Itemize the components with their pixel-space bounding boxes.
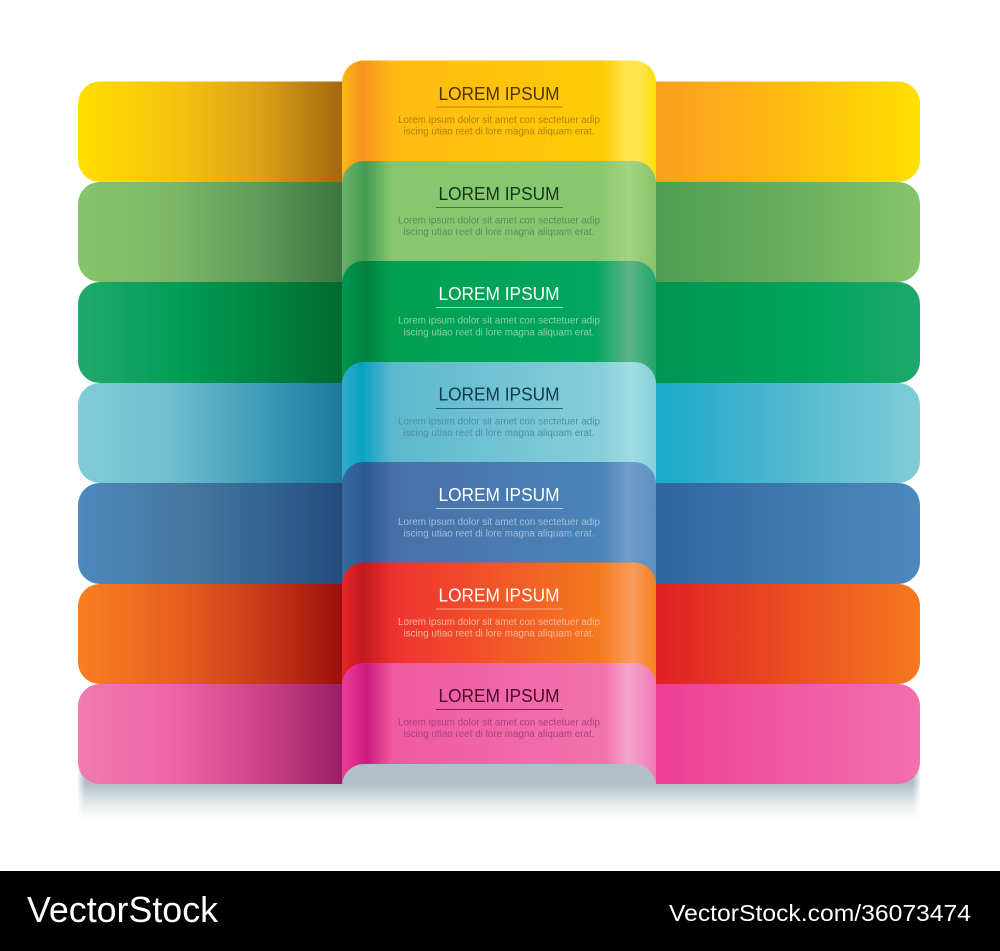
band 7 right: pink bbox=[656, 684, 920, 784]
band 3 left: dark green bbox=[78, 282, 342, 383]
body text 2: iscing utiao reet di lore magna aliquam erat. bbox=[404, 227, 594, 238]
band 4 left: light blue bbox=[78, 383, 342, 483]
band 6 right: orange red bbox=[656, 584, 920, 684]
body text 3: Lorem ipsum dolor sit amet con sectetuer adip bbox=[398, 316, 600, 326]
body text 5: Lorem ipsum dolor sit amet con sectetuer adip bbox=[398, 517, 600, 528]
panel 1: yellow card bbox=[342, 60, 656, 190]
body text 6: iscing utiao reet di lore magna aliquam erat. bbox=[404, 628, 594, 640]
body text 1: iscing utiao reet di lore magna aliquam erat. bbox=[404, 126, 594, 138]
panel 2: light green card bbox=[342, 161, 656, 290]
band 6 left: orange red bbox=[78, 584, 342, 684]
drop shadow under bands bbox=[78, 768, 920, 820]
band 2 right: light green bbox=[656, 182, 920, 282]
body text 1: Lorem ipsum dolor sit amet con sectetuer adip bbox=[398, 115, 600, 126]
body text 4: iscing utiao reet di lore magna aliquam erat. bbox=[404, 428, 594, 439]
band 1 left: yellow bbox=[78, 82, 342, 182]
band 4 right: light blue bbox=[656, 383, 920, 483]
side bands bbox=[78, 82, 920, 784]
heading 4: LOREM IPSUM bbox=[438, 384, 560, 404]
body text 4: Lorem ipsum dolor sit amet con sectetuer adip bbox=[398, 416, 600, 428]
body text 1 bbox=[398, 115, 600, 138]
footer bar bbox=[0, 871, 1000, 951]
panel 3: dark green card bbox=[342, 261, 656, 390]
body text 4 bbox=[398, 416, 600, 439]
band 5 right: blue bbox=[656, 483, 920, 584]
band 2 left: light green bbox=[78, 182, 342, 282]
heading 2: LOREM IPSUM bbox=[438, 184, 560, 204]
body text 5: iscing utiao reet di lore magna aliquam erat. bbox=[404, 528, 594, 540]
body text 6: Lorem ipsum dolor sit amet con sectetuer adip bbox=[398, 617, 600, 628]
panel 4: light blue card bbox=[342, 362, 656, 490]
band 1 right: yellow bbox=[656, 82, 920, 182]
footer image id: VectorStock.com/36073474 bbox=[669, 900, 971, 926]
body text 3: iscing utiao reet di lore magna aliquam erat. bbox=[404, 328, 594, 338]
grey base tab bbox=[342, 764, 656, 784]
footer logo wordmark: VectorStock bbox=[27, 889, 219, 930]
body text 2: Lorem ipsum dolor sit amet con sectetuer adip bbox=[398, 216, 600, 226]
panel 7: pink card bbox=[342, 663, 656, 784]
band 3 right: dark green bbox=[656, 282, 920, 383]
body text 7: iscing utiao reet di lore magna aliquam erat. bbox=[404, 729, 594, 740]
band 7 left: pink bbox=[78, 684, 342, 784]
body text 7 bbox=[398, 718, 600, 740]
panel 6: red orange card bbox=[342, 562, 656, 690]
body text 6 bbox=[398, 617, 600, 640]
heading 3: LOREM IPSUM bbox=[438, 284, 560, 304]
body text 5 bbox=[398, 517, 600, 540]
heading 7: LOREM IPSUM bbox=[438, 686, 560, 706]
heading 1: LOREM IPSUM bbox=[438, 84, 560, 104]
heading 6: LOREM IPSUM bbox=[438, 586, 560, 606]
body text 3 bbox=[398, 316, 600, 338]
band 5 left: blue bbox=[78, 483, 342, 584]
body text 2 bbox=[398, 216, 600, 238]
panel 5: blue card bbox=[342, 462, 656, 590]
heading 5: LOREM IPSUM bbox=[438, 485, 560, 505]
body text 7: Lorem ipsum dolor sit amet con sectetuer adip bbox=[398, 718, 600, 728]
